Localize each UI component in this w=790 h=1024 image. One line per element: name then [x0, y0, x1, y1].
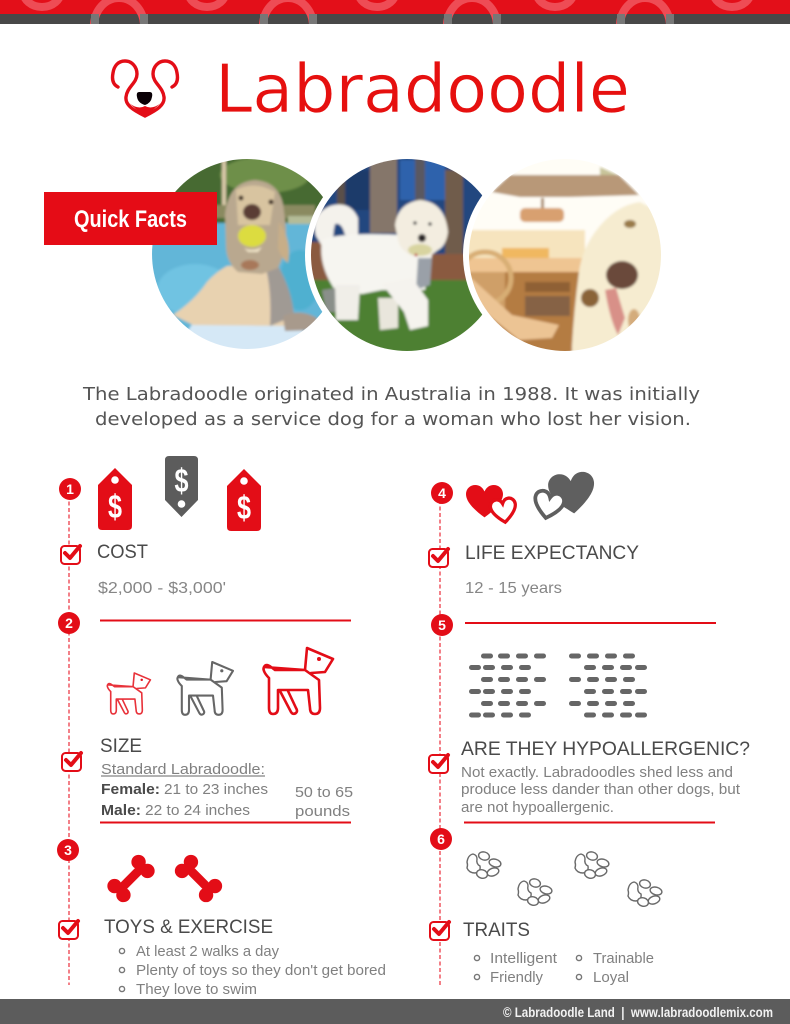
icon: medium dog [177, 662, 233, 715]
intro text: developed as a service dog for a woman who lost her vision. [95, 409, 691, 430]
list: traits: Loyal [593, 969, 629, 986]
checkbox: size [62, 753, 81, 771]
left timeline: 1 [66, 481, 74, 497]
list: toys and exercise [119, 943, 386, 998]
text: standard size details: Male: [101, 802, 141, 819]
left timeline: 2 [65, 615, 73, 631]
checkbox: toys [59, 921, 78, 939]
footer [0, 999, 790, 1024]
icon: price tags: $ [108, 488, 122, 525]
checkbox: traits [430, 922, 449, 940]
text: hypoallergenic answer [461, 765, 740, 816]
title: Labradoodle [215, 50, 630, 128]
left timeline [57, 478, 81, 985]
checkbox: cost [61, 546, 80, 564]
list: toys and exercise: They love to swim [136, 981, 257, 998]
heading: traits: TRAITS [463, 920, 530, 941]
icon: price tags: $ [174, 462, 188, 499]
logo: dog face [113, 61, 177, 117]
checkbox: hypoallergenic [429, 755, 448, 773]
intro text: The Labradoodle originated in Australia in 1988. It was initially [82, 384, 700, 405]
icon: large dog [264, 648, 333, 714]
right timeline: 6 [437, 831, 445, 847]
icon: price tags [98, 456, 261, 531]
list: traits [474, 950, 654, 986]
text: standard size details: pounds [295, 803, 350, 820]
icon: red hearts [466, 485, 518, 524]
photo: dog in car [463, 159, 661, 351]
top banner [0, 0, 790, 24]
photo: white dog on grass [305, 159, 482, 351]
right timeline [430, 482, 453, 987]
text: standard size details: 21 to 23 inches [164, 781, 268, 798]
heading: toys and exercise: TOYS & EXERCISE [104, 917, 273, 938]
photo: dog in pool with tennis ball [152, 159, 323, 349]
heading: life expectancy: LIFE EXPECTANCY [465, 543, 639, 564]
list: toys and exercise: Plenty of toys so they don't get bored [136, 962, 386, 979]
intro text [82, 384, 700, 430]
heading: size: SIZE [100, 736, 142, 757]
quick facts badge [44, 192, 217, 245]
text: standard size details: 50 to 65 [295, 784, 353, 801]
text: standard size details: Female: [101, 781, 160, 798]
text: standard size details: 22 to 24 inches [145, 802, 250, 819]
list: traits: Friendly [490, 969, 543, 986]
checkbox: life expectancy [429, 549, 448, 567]
icon: bones [104, 852, 225, 905]
heading: hypoallergenic: ARE THEY HYPOALLERGENIC? [461, 739, 750, 760]
list: toys and exercise: At least 2 walks a day [136, 943, 279, 960]
icon: paw prints [467, 851, 663, 907]
right timeline: 5 [438, 617, 446, 633]
list: traits: Trainable [593, 950, 654, 967]
icon: price tags: $ [237, 489, 251, 526]
text: hypoallergenic answer: are not hypoallergenic. [461, 800, 614, 816]
text: hypoallergenic answer: Not exactly. Labradoodles shed less and [461, 765, 733, 781]
text: standard size details [101, 761, 353, 820]
text: cost range: $2,000 - $3,000' [98, 580, 226, 597]
text: life expectancy value: 12 - 15 years [465, 580, 562, 597]
icon: small dog [107, 673, 150, 714]
icon: coat texture left [469, 654, 546, 718]
right timeline: 4 [438, 485, 446, 501]
text: hypoallergenic answer: produce less dander than other dogs, but [461, 782, 740, 798]
quick facts badge: Quick Facts [74, 206, 187, 233]
left timeline: 3 [64, 842, 72, 858]
text: standard size details: Standard Labradoodle: [101, 761, 265, 778]
icon: coat texture right [569, 654, 647, 718]
heading: cost: COST [97, 542, 148, 563]
icon: gray hearts [532, 471, 597, 521]
list: traits: Intelligent [490, 950, 558, 967]
